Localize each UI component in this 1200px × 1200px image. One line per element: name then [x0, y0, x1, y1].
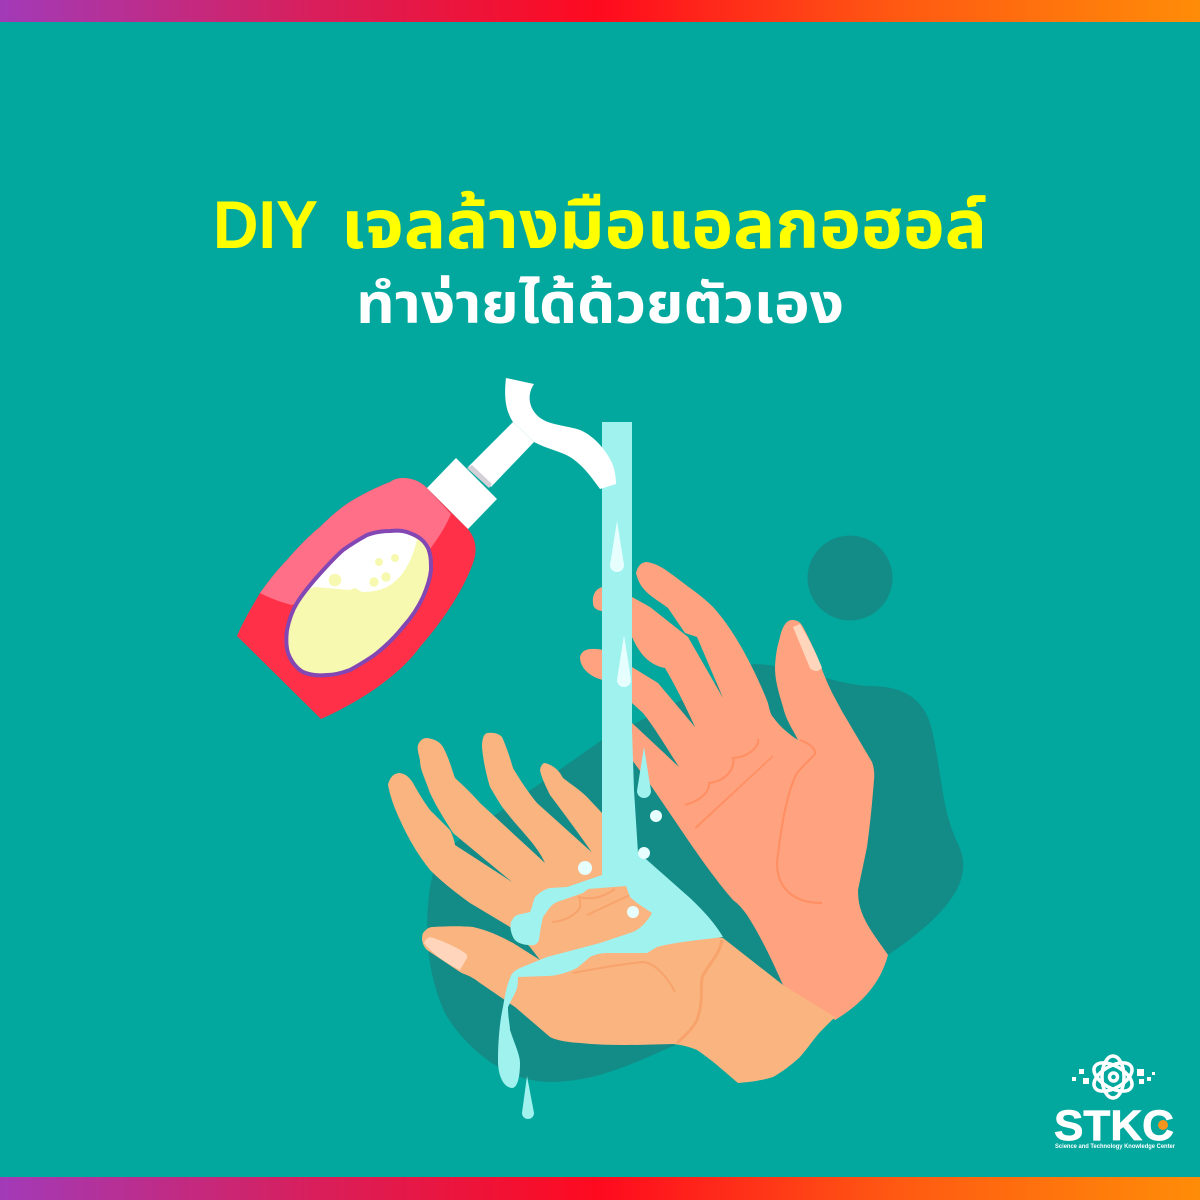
title: DIY [213, 187, 318, 263]
logo: STKC [1054, 1056, 1176, 1150]
water stream [498, 422, 723, 1088]
upper hand thumbnail [793, 624, 822, 671]
logo tagline: Science and Technology Knowledge Center [1055, 1144, 1176, 1150]
subtitle: ทำง่ายได้ด้วยตัวเอง [356, 272, 844, 335]
logo atom icon [1089, 1056, 1137, 1098]
logo orange dot [1158, 1120, 1168, 1130]
bottle body [237, 478, 476, 719]
lower hand thumbnail [424, 937, 467, 970]
pump cap [427, 458, 497, 529]
lower hand creases [552, 889, 722, 1043]
bottle label [286, 531, 431, 675]
logo pixel squares [1072, 1069, 1155, 1084]
logo wordmark: STKC [1054, 1102, 1174, 1150]
background circle [808, 536, 892, 620]
bottle highlight [260, 478, 451, 605]
label foam [306, 531, 417, 592]
stem band [467, 465, 492, 488]
bottom gradient bar [0, 1177, 1200, 1200]
title: เจลล้างมือแอลกอฮอล์ [341, 187, 987, 263]
upper hand [580, 562, 888, 1020]
lower hand [388, 733, 835, 1083]
water droplets [578, 810, 662, 918]
gel bottle [237, 378, 616, 719]
pump stem [468, 422, 534, 487]
foam bubbles [329, 554, 399, 587]
background blob [427, 664, 963, 1082]
pump spout [505, 378, 616, 489]
falling drops [522, 521, 651, 1119]
top gradient bar [0, 0, 1200, 22]
upper hand palm creases [685, 739, 822, 903]
label outline [286, 531, 431, 675]
